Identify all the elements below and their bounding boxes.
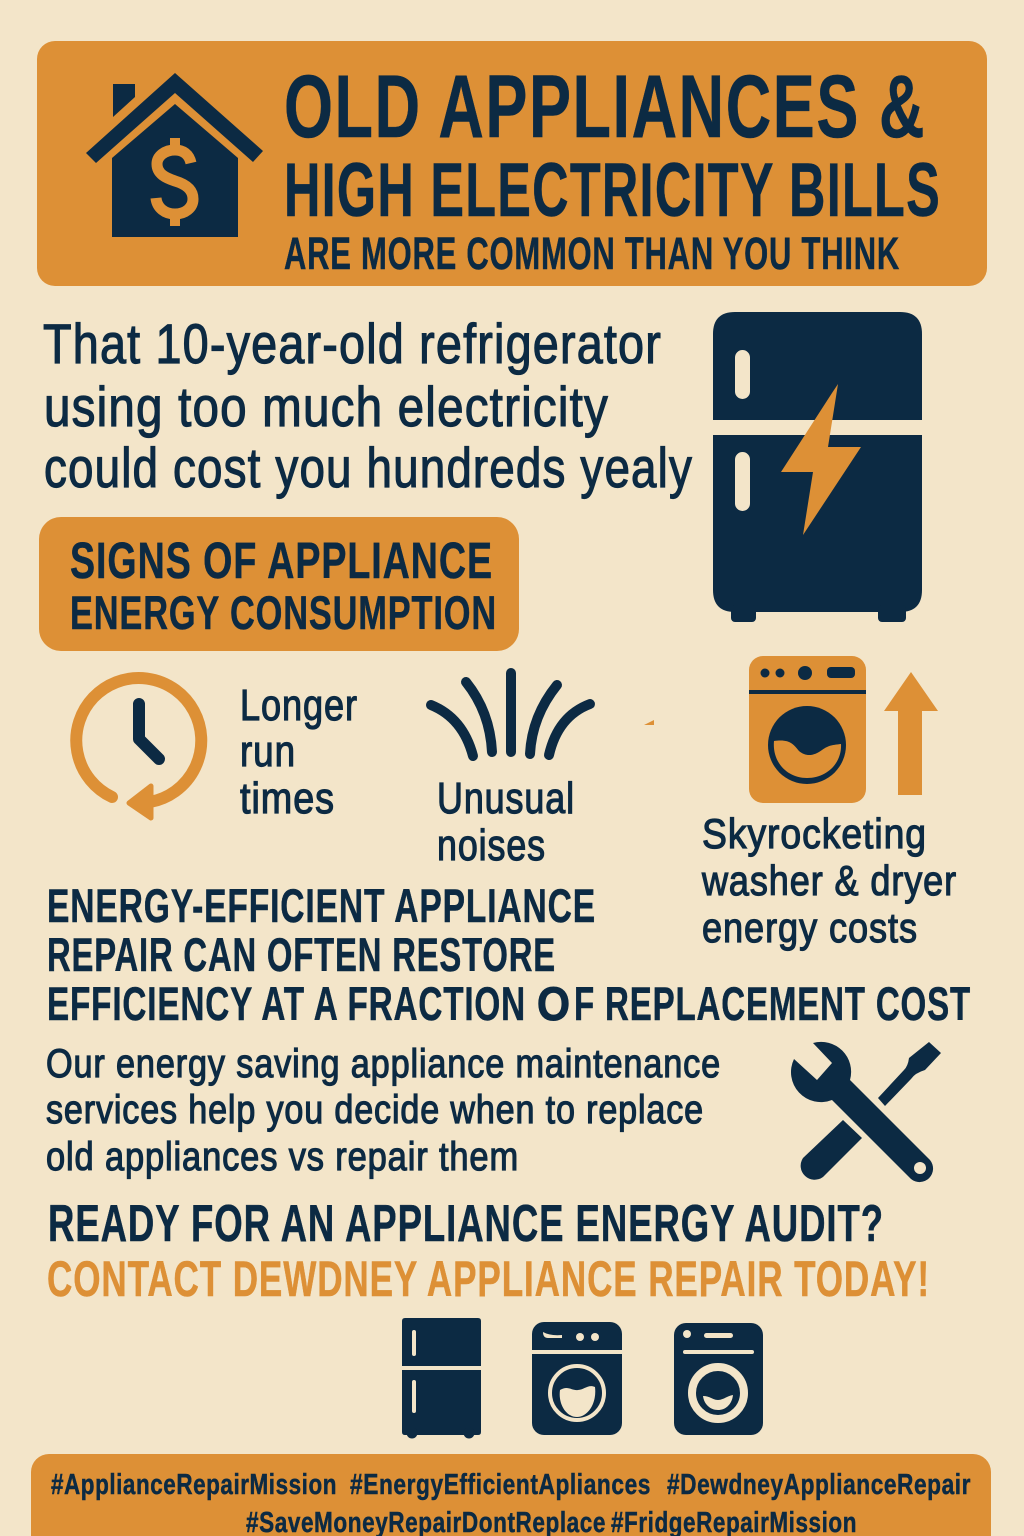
panel: signs heading: SIGNS OF APPLIANCE [70, 532, 493, 589]
call to action [47, 1195, 930, 1307]
icon: refrigerator with lightning bolt [713, 312, 922, 622]
icon: house with dollar sign [86, 73, 263, 237]
icon: noise lines [431, 673, 590, 756]
services text: services help you decide when to replace [46, 1088, 704, 1132]
repair statement: REPAIR CAN OFTEN RESTORE [47, 928, 556, 981]
footer hashtag banner [31, 1454, 991, 1536]
repair statement: ENERGY-EFFICIENT APPLIANCE [47, 879, 596, 932]
repair statement [47, 879, 971, 1030]
label: skyrocketing costs [701, 810, 957, 951]
header banner [37, 41, 987, 286]
panel: signs heading [39, 517, 519, 651]
icon: small washer [532, 1322, 622, 1435]
icon: clock with circular arrow [76, 678, 201, 818]
services text [46, 1042, 721, 1179]
intro text [43, 312, 693, 499]
intro text: using too much electricity [44, 375, 609, 438]
stray orange mark [644, 720, 654, 725]
label: longer run times [240, 681, 358, 823]
label: skyrocketing costs: energy costs [702, 904, 918, 951]
icon: washer with up arrow [749, 656, 938, 803]
panel: signs heading: ENERGY CONSUMPTION [70, 586, 497, 639]
footer hashtag banner: #ApplianceRepairMission [51, 1469, 337, 1501]
icon: small dryer [674, 1323, 763, 1435]
icon: wrench and screwdriver [791, 1042, 941, 1182]
label: unusual noises: noises [437, 821, 546, 870]
label: skyrocketing costs: Skyrocketing [702, 810, 927, 857]
services text: old appliances vs repair them [46, 1135, 519, 1179]
label: longer run times: run [240, 727, 296, 776]
label: unusual noises: Unusual [437, 774, 575, 823]
label: skyrocketing costs: washer & dryer [701, 857, 957, 904]
repair statement: EFFICIENCY AT A FRACTION [47, 977, 526, 1030]
footer hashtag banner: #EnergyEfficientApliances [350, 1469, 651, 1501]
repair statement: O [537, 977, 570, 1030]
services text: Our energy saving appliance maintenance [46, 1042, 721, 1086]
label: longer run times: Longer [240, 681, 358, 730]
intro text: That 10-year-old refrigerator [43, 312, 662, 375]
label: longer run times: times [240, 774, 335, 823]
title [284, 56, 941, 279]
intro text: could cost you hundreds yealy [44, 436, 693, 499]
label: unusual noises [437, 774, 575, 870]
icon: small refrigerator [402, 1318, 481, 1438]
